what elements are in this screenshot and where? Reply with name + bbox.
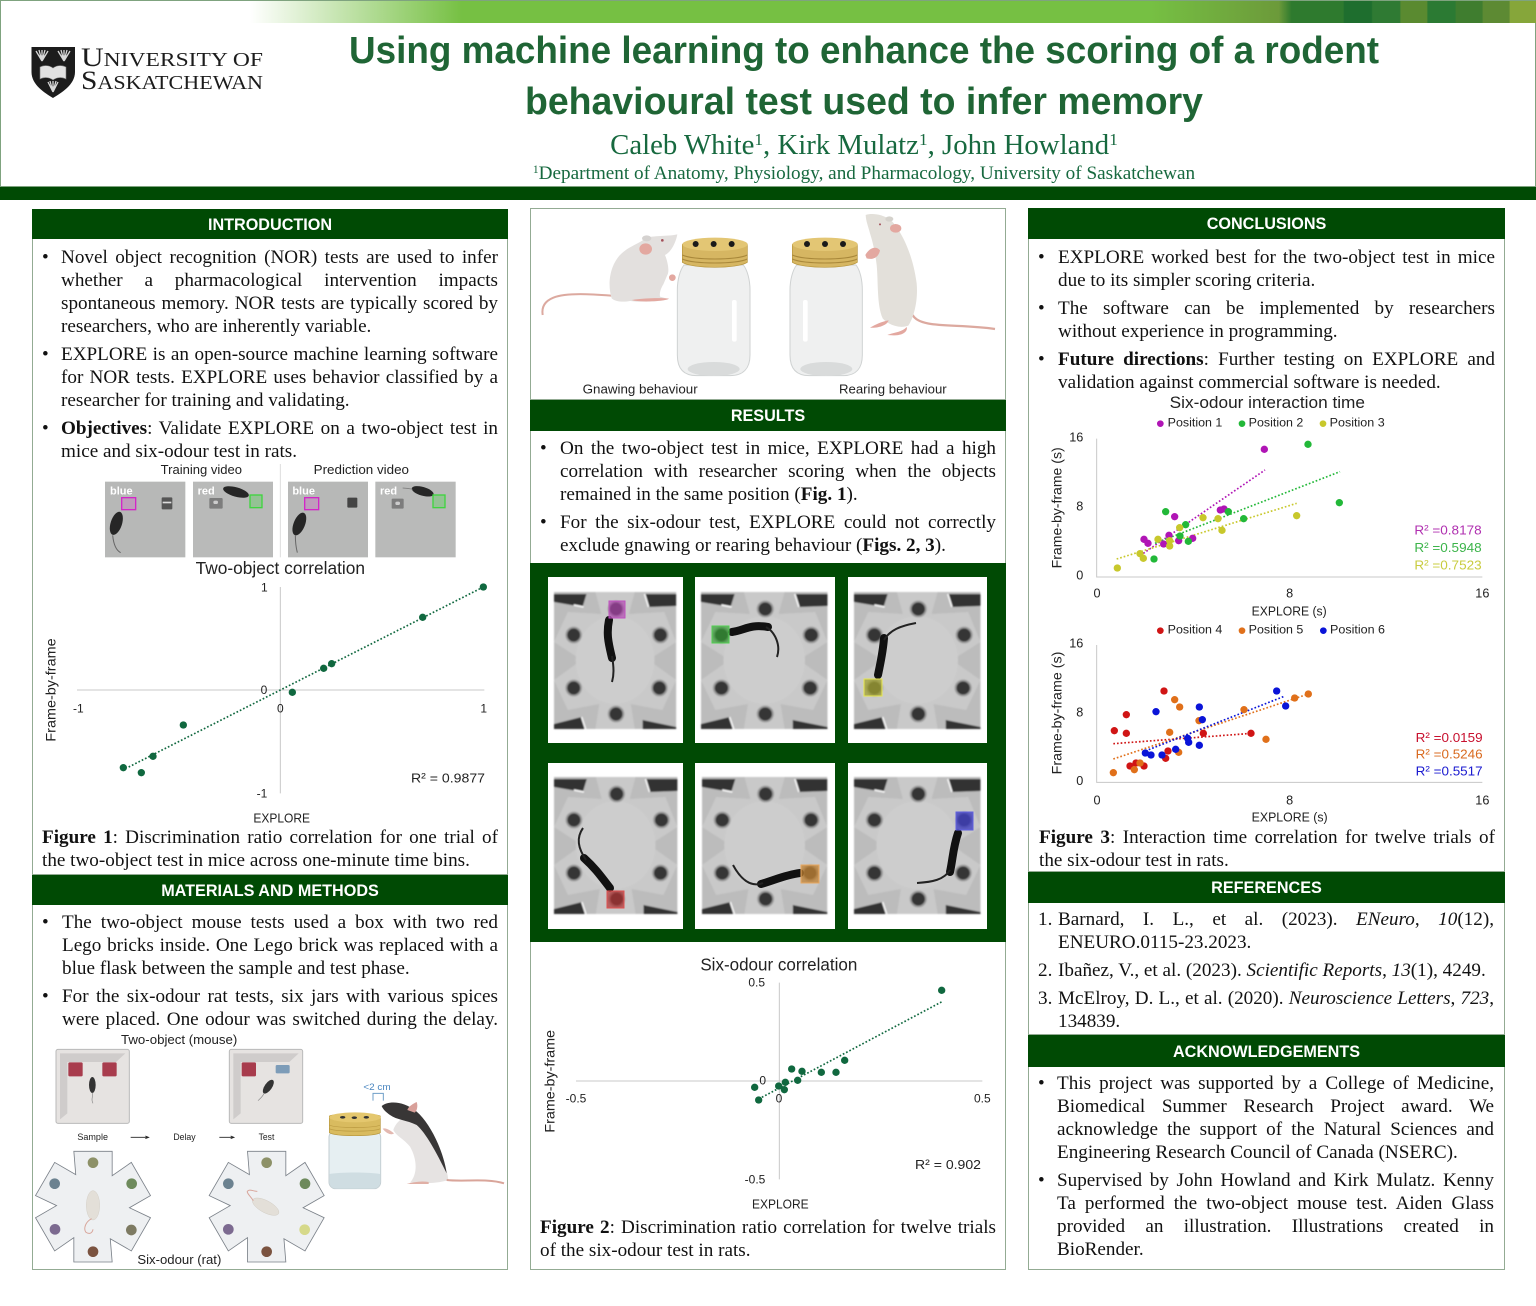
jar and hooded rat [329,1082,504,1189]
video stills: blue [292,486,315,498]
text: two-object tests [42,912,498,979]
text: two-object result: correlation with researcher scoring when the objects [560,461,996,482]
video stills: red [380,486,397,498]
panel: references: 2. [1038,960,1052,981]
panel: introduction: • [42,247,49,268]
rearing rat [865,214,995,335]
text: contributions: provided an illustration. Illustrations created in [1057,1216,1494,1237]
text: objectives: Objectives: Validate EXPLORE on a two-object test in [61,418,498,439]
photo 5 [695,763,835,929]
reference 3: McElroy, D. L., et al. (2020). Neuroscience Letters, 723, [1058,988,1494,1009]
logo: University of Saskatchewan: SASKATCHEWAN [81,66,263,95]
panel: conclusions: • [1038,247,1045,268]
chart: six-odour interaction time, positions 1 to 3: 8 [1076,500,1083,514]
scatter chart: two-object correlation: Frame-by-frame [42,638,58,742]
chart: six-odour interaction time, positions 1 to 3: 16 [1069,431,1083,445]
heading: materials and methods: MATERIALS AND METHODS [161,882,379,900]
reference 1 [1038,909,1494,953]
figure 2: six-odour correlation chart: EXPLORE [752,1196,809,1211]
timeline labels: Delay [173,1132,196,1142]
panel: conclusions: • [1038,298,1045,319]
six-odour sample arena [36,1151,150,1262]
figure 2: six-odour correlation chart: Six-odour correlation [700,955,857,975]
text: future directions [1038,349,1495,393]
text: objectives [42,418,498,462]
heading: acknowledgements: ACKNOWLEDGEMENTS [1173,1043,1360,1061]
heading: references [1028,872,1505,903]
caption: figure 1: the two-object test in mice across one-minute time bins. [42,850,470,871]
scatter chart: two-object correlation: 1 [261,580,268,594]
text: two-object result: remained in the same position (Fig. 1). [560,484,858,505]
video captions: Training video [161,463,242,477]
text: six-odour tests: were placed. One odour was switched during the delay. [62,1009,498,1030]
chart: six-odour interaction time, positions 4 to 6: 16 [1475,793,1489,807]
text: funding [1038,1073,1494,1163]
heading: results [530,400,1006,431]
scatter chart: two-object correlation: -1 [73,702,84,716]
caption: figure 1 [42,827,498,871]
photo 1 [548,577,683,743]
text: EXPLORE [42,344,498,411]
photo 3 [848,577,987,743]
text: implementation [1038,298,1495,342]
legend: Position 4 [1168,623,1222,637]
panel: introduction: • [42,344,49,365]
header banner [0,0,1536,187]
text: six-odour result [540,512,996,556]
caption: figure 3: the six-odour test in rats. [1039,850,1229,871]
video captions: Prediction video [314,463,409,477]
legend: Position 5 [1249,623,1303,637]
video captions [161,463,409,477]
scatter chart: two-object correlation: 1 [480,702,487,716]
gnawing rat [542,234,677,315]
captions: Gnawing behaviour [583,382,698,397]
text: two-object result [540,438,996,505]
illustration: gnawing and rearing behaviour: Rearing behaviour [839,382,947,397]
text: two-object result: On the two-object test in mice, EXPLORE had a high [560,438,996,459]
panel: references: 3. [1038,988,1052,1009]
text: funding: This project was supported by a College of Medicine, [1057,1073,1494,1094]
text: best for two-object: due to its simpler scoring criteria. [1058,270,1315,291]
panel: introduction [32,209,508,875]
panel: references: 1. [1038,909,1052,930]
chart: six-odour interaction time, positions 4 to 6: 8 [1076,705,1083,719]
heading: acknowledgements [1028,1035,1505,1067]
title [349,30,1379,123]
logo: University of Saskatchewan [32,43,263,98]
legend: Position 3 [1330,416,1385,430]
video stills [105,482,456,557]
text: implementation: without experience in programming. [1058,321,1338,342]
title: Using machine learning to enhance the scoring of a rodent [349,30,1379,72]
panel: references [1028,872,1505,1035]
text: six-odour result: For the six-odour test, EXPLORE could not correctly [560,512,996,533]
panel: results: • [540,438,547,459]
chart: six-odour interaction time, positions 1 to 3: 0 [1076,568,1083,582]
text: EXPLORE: researcher for training and validating. [61,390,350,411]
text: funding: Biomedical Summer Research Project award. We [1057,1096,1494,1117]
panel: acknowledgements: • [1038,1170,1045,1191]
illustration: experimental design [35,1033,504,1267]
chart: six-odour interaction time, positions 1 to 3: R² =0.7523 [1414,558,1482,573]
legend [1157,416,1385,430]
panel: materials and methods: • [42,912,49,933]
timeline labels [77,1132,275,1142]
caption: figure 3: Figure 3: Interaction time correlation for twelve trials of [1039,827,1495,848]
figure 1: video stills and two-object correlation chart [42,463,487,826]
illustration: experimental design: Two-object (mouse) [121,1033,237,1047]
jar and hooded rat: <2 cm [363,1082,391,1092]
chart: six-odour interaction time, positions 4 to 6: R² =0.5517 [1416,764,1483,779]
text: six-odour tests: For the six-odour rat tests, six jars with various spices [62,986,498,1007]
panel: acknowledgements: • [1038,1073,1045,1094]
chart: six-odour interaction time, positions 1 to 3: Six-odour interaction time [1170,393,1365,412]
text: NOR tests: Novel object recognition (NOR) tests are used to infer [61,247,498,268]
scatter chart: two-object correlation: R² = 0.9877 [411,771,485,786]
text: future directions: Future directions: Further testing on EXPLORE and [1058,349,1495,370]
text: NOR tests: spontaneous memory. NOR tests are typically scored by [61,293,498,314]
figure 2: six-odour correlation chart: 0.5 [974,1092,991,1106]
caption: figure 2: Figure 2: Discrimination ratio correlation for twelve trials [540,1217,996,1238]
heading: materials and methods [32,875,508,905]
chart: six-odour interaction time, positions 1 to 3: 8 [1286,587,1293,601]
photo 4 [548,763,683,929]
panel: introduction: • [42,418,49,439]
text: EXPLORE: for NOR tests. EXPLORE uses behavior classified by a [61,367,498,388]
photo grid: six arena stills [530,563,1006,942]
text: contributions: BioRender. [1057,1239,1144,1260]
chart: six-odour interaction time, positions 4 to 6: 0 [1093,793,1101,807]
figure 2: six-odour correlation chart: -0.5 [566,1092,587,1106]
text: contributions: Supervised by John Howland and Kirk Mulatz. Kenny [1057,1170,1494,1191]
left jar [677,238,750,376]
scatter chart: two-object correlation: 0 [277,702,284,716]
text: NOR tests: whether a pharmacological intervention impacts [61,270,498,291]
timeline labels: Test [259,1132,275,1142]
text: best for two-object: EXPLORE worked best for the two-object test in mice [1058,247,1495,268]
text: NOR tests: researchers, who are inherently variable. [61,316,371,337]
figure 2: six-odour correlation chart: R² = 0.902 [915,1157,981,1172]
affiliation: 1Department of Anatomy, Physiology, and Pharmacology, University of Saskatchewan [533,163,1195,184]
chart: six-odour interaction time, positions 1 to 3: R² =0.8178 [1414,523,1482,538]
chart: six-odour interaction time, positions 4 to 6: 0 [1076,774,1083,788]
legend: Position 6 [1330,623,1385,637]
heading: introduction: INTRODUCTION [208,216,332,234]
chart: six-odour interaction time, positions 4 to 6: 8 [1286,793,1293,807]
chart: six-odour interaction time, positions 4 to 6: R² =0.5246 [1416,747,1483,762]
legend [1157,623,1385,637]
heading: conclusions: CONCLUSIONS [1207,215,1326,233]
logo: University of Saskatchewan: UNIVERSITY OF [81,43,263,72]
reference 3 [1038,988,1494,1032]
heading: results: RESULTS [731,407,805,425]
text: contributions [1038,1170,1494,1260]
title: behavioural test used to infer memory [525,81,1203,123]
reference 1: ENEURO.0115-23.2023. [1058,932,1251,953]
video stills: blue [110,486,133,498]
figure 2: six-odour correlation chart: -0.5 [745,1172,766,1186]
text: best for two-object [1038,247,1495,291]
text: NOR tests [42,247,498,337]
chart: six-odour interaction time, positions 1 to 3: EXPLORE (s) [1252,604,1327,619]
panel: materials and methods: • [42,986,49,1007]
scatter chart: two-object correlation: -1 [257,786,268,800]
chart: six-odour interaction time, positions 4 to 6: 16 [1069,637,1083,651]
chart: six-odour interaction time, positions 1 to 3 [1050,393,1489,619]
panel: acknowledgements [1028,1035,1505,1270]
text: two-object tests: blue flask between the sample and test phase. [62,958,410,979]
text: funding: Engineering Research Council of Canada (NSERC). [1057,1142,1458,1163]
heading: conclusions [1028,208,1505,239]
chart title: Two-object correlation [196,558,365,578]
scatter chart: two-object correlation: 0 [261,683,268,697]
chart: six-odour interaction time, positions 1 to 3: 16 [1475,587,1489,601]
panel: conclusions [1028,208,1505,872]
figure 2: six-odour correlation chart: Frame-by-frame [542,1030,558,1133]
text: future directions: validation against commercial software is needed. [1058,372,1441,393]
scatter chart: two-object correlation [42,580,487,826]
two-object sample box [56,1049,129,1123]
text: implementation: The software can be implemented by researchers [1058,298,1495,319]
chart: six-odour interaction time, positions 4 to 6 [1050,623,1489,825]
text: two-object tests: The two-object mouse tests used a box with two red [62,912,498,933]
panel: results [530,400,1006,1270]
photo 2 [695,577,835,743]
caption: figure 2: of the six-odour test in rats. [540,1240,751,1261]
illustration: experimental design: Six-odour (rat) [137,1252,221,1267]
text: funding: acknowledge the support of the Natural Sciences and [1057,1119,1494,1140]
text: contributions: Ta performed the two-object mouse test. Aiden Glass [1057,1193,1494,1214]
illustration: gnawing and rearing behaviour [541,214,996,397]
video stills: red [198,486,215,498]
photo 6 [848,763,987,929]
scatter chart: two-object correlation: EXPLORE [253,811,310,826]
text: six-odour tests [42,986,498,1030]
chart: six-odour interaction time, positions 4 to 6: Frame-by-frame (s) [1050,652,1065,774]
panel: results: • [540,512,547,533]
reference 2: Ibañez, V., et al. (2023). Scientific Reports, 13(1), 4249. [1058,960,1486,981]
caption: figure 2 [540,1217,996,1261]
text: EXPLORE: EXPLORE is an open-source machine learning software [61,344,498,365]
figure 2: six-odour correlation chart: 0 [759,1073,766,1087]
figure 2: six-odour correlation chart: 0.5 [748,976,765,990]
text: six-odour result: exclude gnawing or rearing behaviour (Figs. 2, 3). [560,535,946,556]
heading: references: REFERENCES [1211,879,1322,897]
chart: six-odour interaction time, positions 4 to 6: R² =0.0159 [1416,730,1483,745]
text: objectives: mice and six-odour test in rats. [61,441,297,462]
panel: materials and methods [32,875,508,1270]
legend: Position 1 [1168,416,1222,430]
heading: introduction [32,209,508,239]
figure 2: six-odour correlation chart [542,955,991,1211]
chart: six-odour interaction time, positions 1 to 3: 0 [1093,587,1101,601]
authors: Caleb White1, Kirk Mulatz1, John Howland1 [610,129,1118,161]
reference 1: Barnard, I. L., et al. (2023). ENeuro, 10(12), [1058,909,1494,930]
chart: six-odour interaction time, positions 4 to 6: EXPLORE (s) [1252,810,1328,825]
timeline labels: Sample [77,1132,108,1142]
panel: conclusions: • [1038,349,1045,370]
figure 2: six-odour correlation chart: 0 [776,1092,783,1106]
chart: six-odour interaction time, positions 1 to 3: Frame-by-frame (s) [1050,447,1065,568]
reference 3: 134839. [1058,1011,1120,1032]
caption: figure 3 [1039,827,1495,871]
top gradient bar [250,1,1536,23]
right jar [790,238,862,376]
legend: Position 2 [1249,416,1303,430]
caption: figure 1: Figure 1: Discrimination ratio correlation for one trial of [42,827,498,848]
panel: gnawing and rearing illustration [530,208,1006,400]
text: two-object tests: Lego bricks inside. One Lego brick was replaced with a [62,935,498,956]
dark green band [0,187,1536,200]
chart: six-odour interaction time, positions 1 to 3: R² =0.5948 [1414,540,1482,555]
two-object test box [229,1049,303,1123]
six-odour test arena [209,1151,324,1262]
